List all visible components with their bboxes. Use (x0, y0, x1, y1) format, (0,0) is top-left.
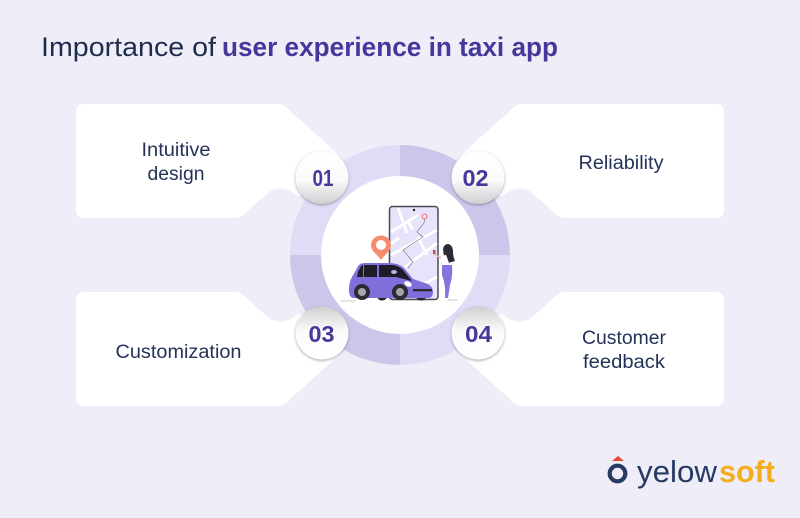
badge 01: 01 (312, 165, 334, 191)
panel: intuitive design (76, 104, 340, 218)
phone with map (390, 206, 438, 300)
label: reliability: Reliability (578, 153, 664, 174)
panel: customization (76, 292, 340, 406)
badge 01 (296, 151, 348, 204)
title: Importance of (41, 32, 217, 62)
car (341, 263, 458, 301)
badge 03: 03 (308, 321, 334, 347)
title: user experience in taxi app (222, 32, 558, 62)
badge 04: 04 (465, 321, 492, 347)
badge 02 (452, 151, 504, 204)
logo wordmark: yelow (637, 454, 718, 489)
segmented ring (290, 145, 510, 365)
badge 03 (296, 306, 348, 360)
badge 02: 02 (462, 165, 488, 191)
logo: yelowsoft (610, 454, 775, 489)
center white disc (321, 176, 479, 334)
label: intuitive design: design (148, 164, 204, 185)
logo wordmark: soft (719, 454, 775, 489)
illustration: taxi app (341, 206, 458, 301)
label: customer feedback: feedback (583, 352, 666, 373)
label: intuitive design: Intuitive (142, 140, 210, 161)
panel: reliability (460, 104, 724, 218)
woman figure (433, 244, 455, 298)
panel: customer feedback (460, 292, 724, 406)
logo mark (610, 456, 625, 481)
badge 04 (452, 306, 504, 360)
label: customer feedback: Customer (582, 328, 667, 349)
label: customization: Customization (116, 342, 242, 363)
location pin (371, 236, 391, 260)
